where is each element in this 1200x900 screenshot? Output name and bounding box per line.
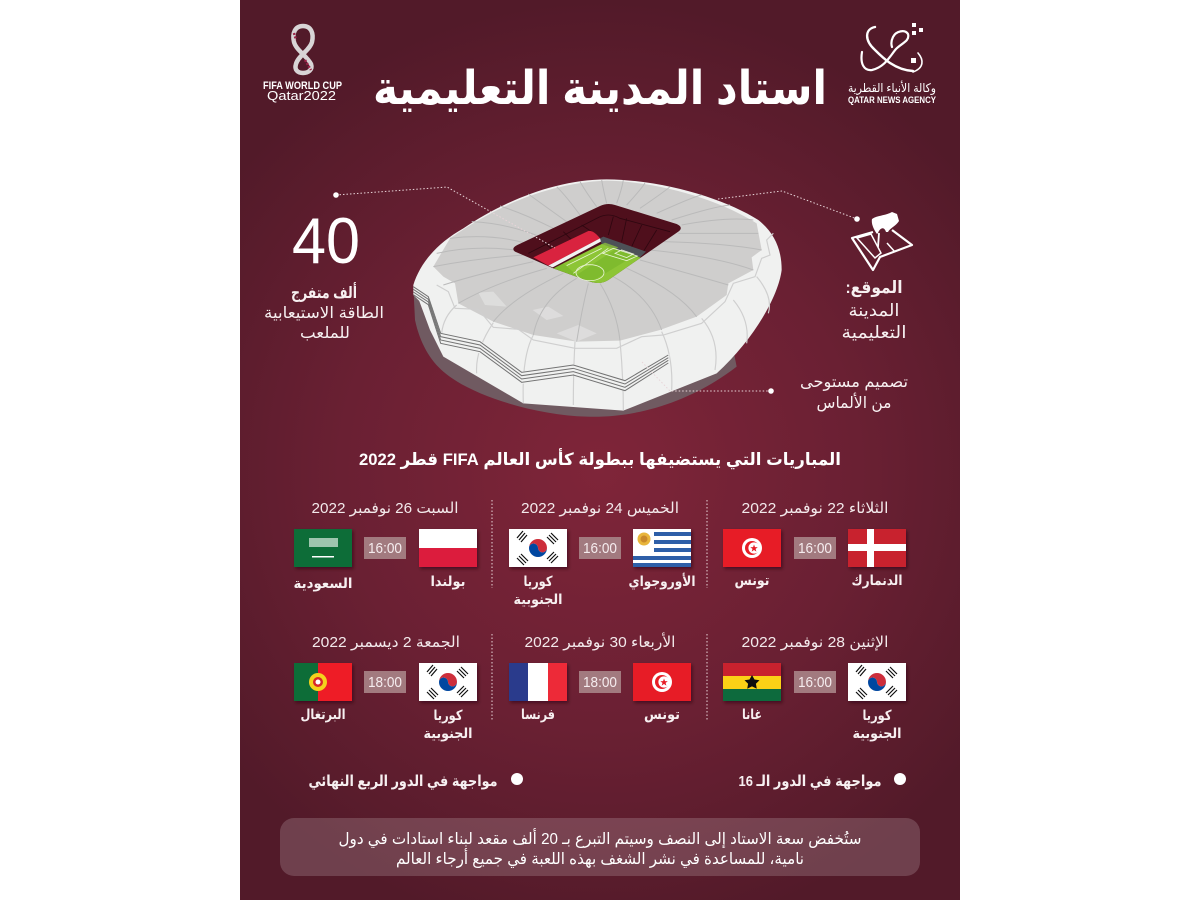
title: استاد المدينة التعليمية bbox=[373, 61, 827, 114]
stat: capacity 40 bbox=[264, 204, 384, 342]
match: South Korea vs Ghana: 16:00 bbox=[798, 674, 832, 691]
match: South Korea vs Portugal: الجنوبية bbox=[424, 725, 472, 742]
match: Tunisia vs France: تونس bbox=[644, 706, 680, 723]
logo: FIFA World Cup Qatar 2022 bbox=[263, 26, 342, 103]
match: Denmark vs Tunisia: الدنمارك bbox=[852, 572, 902, 588]
leader line: location bbox=[718, 191, 860, 222]
callout: seat donation note: نامية، للمساعدة في نشر الشغف بهذه اللعبة في جميع أرجاء العالم bbox=[396, 848, 804, 869]
match: Uruguay vs South Korea bbox=[509, 500, 696, 608]
match: Uruguay vs South Korea: كوريا bbox=[524, 573, 553, 590]
callout: seat donation note bbox=[280, 818, 920, 876]
match: South Korea vs Portugal: الجمعة 2 ديسمبر 2022 bbox=[312, 634, 460, 651]
leader line: capacity bbox=[333, 187, 555, 248]
match: Poland vs Saudi Arabia: 16:00 bbox=[368, 540, 402, 557]
icon: hand pinning map bbox=[852, 212, 912, 270]
match: Poland vs Saudi Arabia: السبت 26 نوفمبر 2022 bbox=[312, 500, 458, 517]
logo: FIFA World Cup Qatar 2022: Qatar2022 bbox=[267, 88, 336, 103]
match: Denmark vs Tunisia: الثلاثاء 22 نوفمبر 2022 bbox=[742, 500, 888, 517]
match: Uruguay vs South Korea: الخميس 24 نوفمبر 2022 bbox=[521, 500, 679, 517]
match: South Korea vs Portugal: كوريا bbox=[434, 707, 463, 724]
logo: FIFA World Cup Qatar 2022: FIFA WORLD CUP bbox=[263, 80, 342, 92]
match: Uruguay vs South Korea: الجنوبية bbox=[514, 591, 562, 608]
text: location: الموقع: bbox=[846, 278, 902, 298]
match: Denmark vs Tunisia: تونس bbox=[734, 572, 770, 589]
match: South Korea vs Ghana bbox=[723, 634, 906, 742]
match: South Korea vs Portugal: البرتغال bbox=[300, 706, 346, 723]
legend: quarter-final: مواجهة في الدور الربع النهائي bbox=[308, 773, 498, 790]
match: South Korea vs Portugal: 18:00 bbox=[368, 674, 402, 691]
text: location bbox=[842, 278, 906, 342]
match: South Korea vs Portugal bbox=[294, 634, 477, 742]
match: South Korea vs Ghana: غانا bbox=[742, 706, 762, 722]
match: Denmark vs Tunisia bbox=[723, 500, 906, 589]
heading: matches: المباريات التي يستضيفها ببطولة كأس العالم FIFA قطر 2022 bbox=[359, 448, 841, 470]
stat: capacity 40: 40 bbox=[292, 204, 360, 277]
illustration: stadium bbox=[413, 179, 782, 417]
logo: Qatar News Agency: QATAR NEWS AGENCY bbox=[848, 95, 936, 105]
match: Denmark vs Tunisia: 16:00 bbox=[798, 540, 832, 557]
stat: capacity 40: للملعب bbox=[300, 325, 350, 342]
callout: seat donation note: ستُخفض سعة الاستاد إلى النصف وسيتم التبرع بـ 20 ألف مقعد لبناء استادات في دول bbox=[338, 828, 862, 849]
legend: round of 16: مواجهة في الدور الـ 16 bbox=[738, 773, 882, 790]
match: South Korea vs Ghana: كوريا bbox=[862, 707, 892, 724]
leader line: design bbox=[642, 362, 774, 394]
match: Tunisia vs France bbox=[509, 632, 691, 723]
background panel bbox=[240, 0, 960, 900]
logo: Qatar News Agency bbox=[848, 23, 936, 105]
match: Poland vs Saudi Arabia bbox=[294, 500, 477, 592]
text: location: التعليمية bbox=[842, 323, 906, 342]
match: Tunisia vs France: 18:00 bbox=[583, 674, 617, 691]
match: South Korea vs Ghana: الجنوبية bbox=[852, 725, 902, 742]
match: Tunisia vs France: الأربعاء 30 نوفمبر 2022 bbox=[524, 632, 676, 651]
match: Poland vs Saudi Arabia: بولندا bbox=[430, 573, 466, 590]
match: Uruguay vs South Korea: 16:00 bbox=[583, 540, 617, 557]
match: South Korea vs Ghana: الإثنين 28 نوفمبر 2022 bbox=[742, 634, 888, 651]
text: diamond-inspired design: تصميم مستوحى bbox=[800, 374, 908, 392]
stat: capacity 40: الطاقة الاستيعابية bbox=[264, 305, 384, 322]
text: diamond-inspired design bbox=[800, 374, 908, 413]
stat: capacity 40: ألف متفرج bbox=[291, 282, 357, 302]
match: Poland vs Saudi Arabia: السعودية bbox=[294, 575, 352, 592]
logo: Qatar News Agency: وكالة الأنباء القطرية bbox=[848, 80, 936, 96]
text: diamond-inspired design: من الألماس bbox=[816, 392, 892, 413]
match: Tunisia vs France: فرنسا bbox=[521, 706, 555, 723]
match: Uruguay vs South Korea: الأوروجواي bbox=[628, 573, 696, 591]
text: location: المدينة bbox=[848, 301, 900, 320]
